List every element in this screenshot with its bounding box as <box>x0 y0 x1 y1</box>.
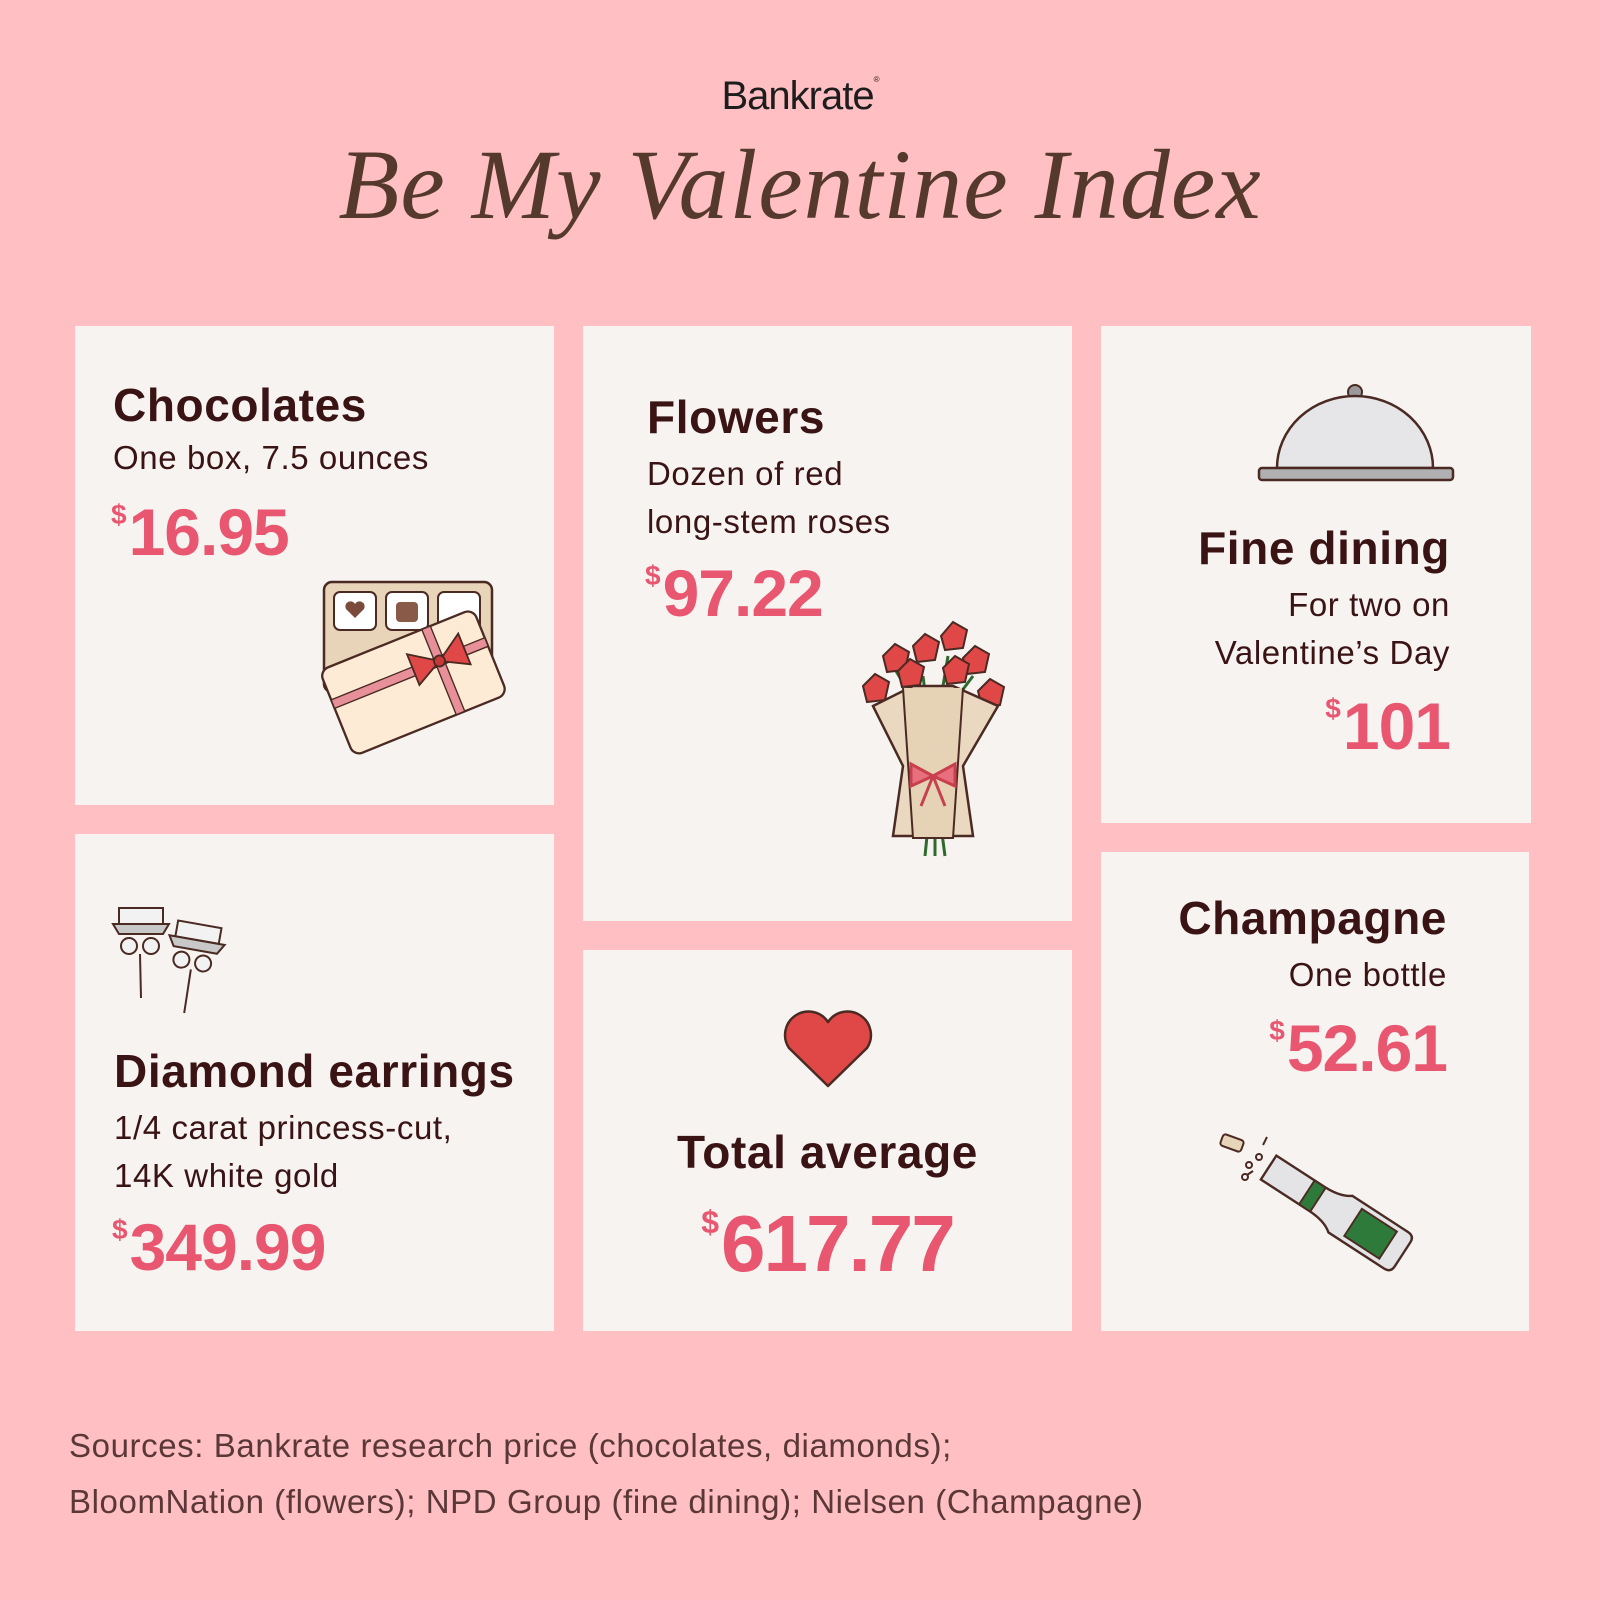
panel: diamond earrings <box>75 834 554 1331</box>
price: fine dining: $101 <box>1325 689 1450 763</box>
panel: total average <box>583 950 1072 1331</box>
icon: rose bouquet <box>862 620 1006 856</box>
icon: champagne bottle <box>1219 1133 1414 1272</box>
heading: diamond earrings: Diamond earrings <box>114 1045 515 1097</box>
text: flowers description: long-stem roses <box>647 503 891 540</box>
price: chocolates: $16.95 <box>111 495 289 569</box>
text: sources: Sources: Bankrate research price (chocolates, diamonds); <box>69 1427 952 1464</box>
text: flowers description <box>647 455 891 540</box>
text: champagne description: One bottle <box>1289 956 1447 993</box>
text: fine dining description <box>1214 586 1450 671</box>
text: fine dining description: Valentine’s Day <box>1215 634 1450 671</box>
price: flowers: $97.22 <box>645 556 823 630</box>
text: chocolates description: One box, 7.5 ounces <box>113 439 429 476</box>
icon: heart <box>784 1010 872 1088</box>
price: total: $617.77 <box>701 1199 954 1288</box>
icon: earrings <box>111 907 226 1014</box>
panel: fine dining <box>1101 326 1531 823</box>
heading: total average: Total average <box>677 1126 978 1178</box>
heading: flowers: Flowers <box>647 391 825 443</box>
text: sources: BloomNation (flowers); NPD Group (fine dining); Nielsen (Champagne) <box>69 1483 1144 1520</box>
icon: serving dome <box>1258 384 1454 482</box>
panel: champagne <box>1101 852 1529 1331</box>
text: sources <box>69 1427 1144 1520</box>
logo: Bankrate: Bankrate® <box>721 74 878 118</box>
price: champagne: $52.61 <box>1269 1011 1447 1085</box>
panel: flowers <box>583 326 1072 921</box>
text: flowers description: Dozen of red <box>647 455 843 492</box>
panel: chocolates <box>75 326 554 805</box>
text: earrings description: 14K white gold <box>114 1157 339 1194</box>
text: fine dining description: For two on <box>1288 586 1450 623</box>
price: earrings: $349.99 <box>112 1210 325 1284</box>
text: earrings description: 1/4 carat princess-cut, <box>114 1109 452 1146</box>
title: Be My Valentine Index <box>338 129 1262 240</box>
heading: champagne: Champagne <box>1178 892 1447 944</box>
text: earrings description <box>114 1109 452 1194</box>
heading: chocolates: Chocolates <box>113 379 367 431</box>
icon: chocolate box <box>321 580 506 754</box>
heading: fine dining: Fine dining <box>1198 522 1450 574</box>
